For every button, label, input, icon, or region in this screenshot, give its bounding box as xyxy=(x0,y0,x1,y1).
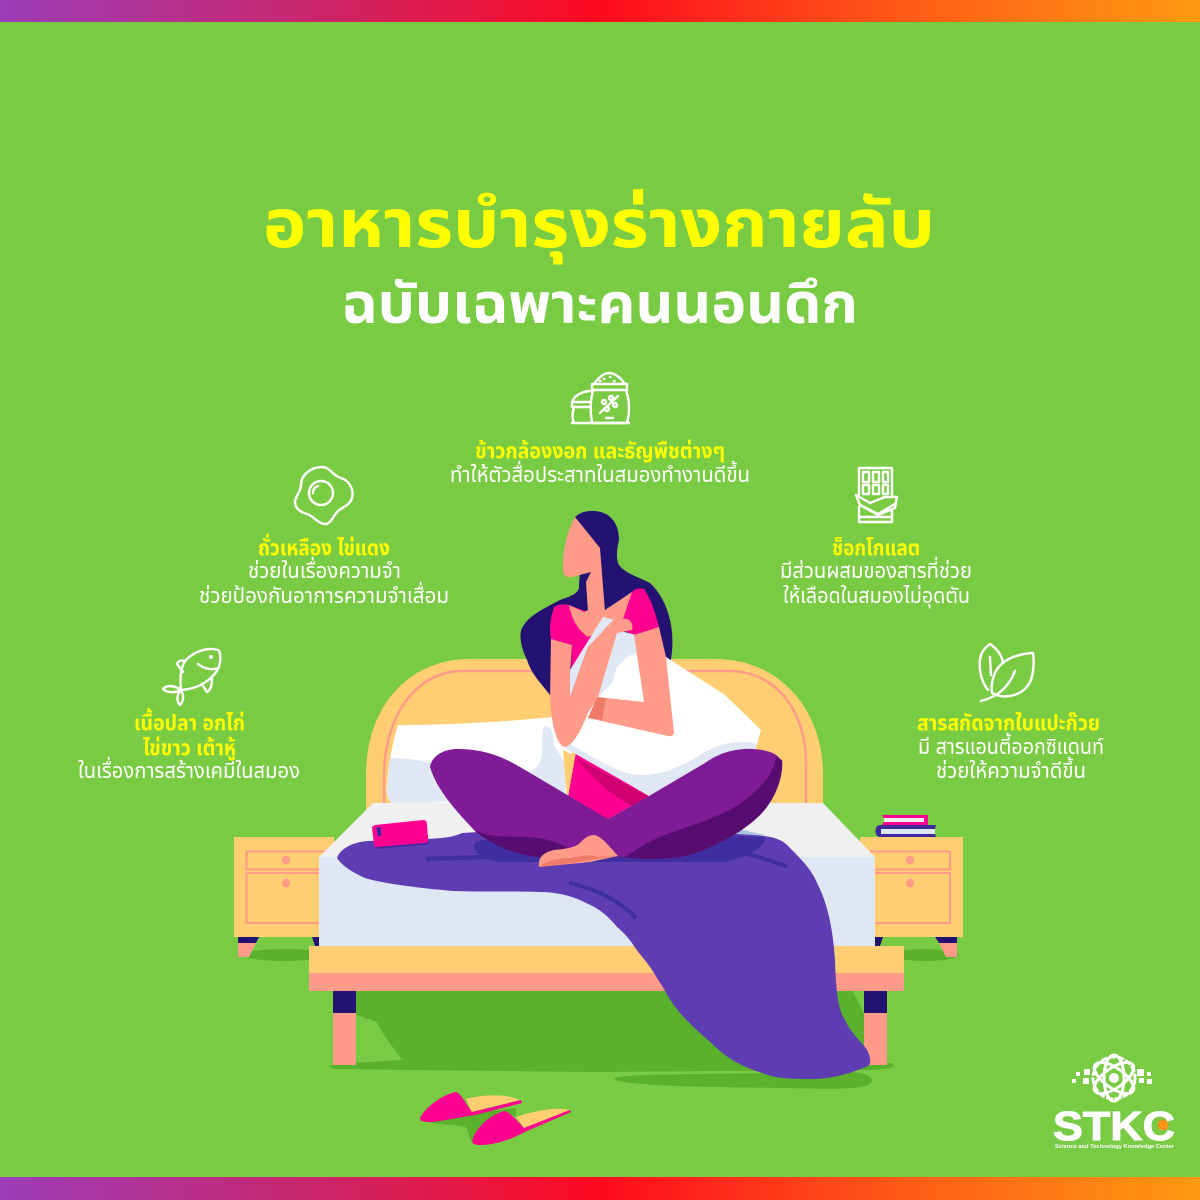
right nightstand xyxy=(860,837,963,957)
left slipper xyxy=(420,1092,522,1122)
headboard xyxy=(366,659,823,810)
slipper shadow xyxy=(425,1108,516,1143)
top gradient bar xyxy=(0,0,1200,22)
text: soybeans and egg yolk xyxy=(199,534,449,608)
text: ginkgo extract: สารสกัดจากใบแปะก๊วย xyxy=(917,712,1100,735)
right arm xyxy=(588,627,674,736)
blanket xyxy=(337,825,870,1079)
right slipper xyxy=(472,1109,571,1145)
hair xyxy=(520,511,672,700)
text: fish, chicken breast, egg white, tofu: ในเรื่องการสร้างเคมีในสมอง xyxy=(78,756,300,783)
text: brown rice and grains xyxy=(450,440,750,487)
text: chocolate xyxy=(780,537,972,609)
shadow on mattress behind legs xyxy=(705,825,765,845)
text: soybeans and egg yolk: ช่วยในเรื่องความจำ xyxy=(248,556,401,583)
left arm xyxy=(550,618,632,747)
text: ginkgo extract xyxy=(917,712,1104,783)
text: soybeans and egg yolk: ถั่วเหลือง ไข่แดง xyxy=(258,534,390,560)
icon: fish xyxy=(163,649,220,705)
hugged pillow xyxy=(560,617,761,800)
left nightstand xyxy=(234,837,336,957)
torso xyxy=(563,750,649,819)
text: chocolate: ช็อกโกแลต xyxy=(832,537,920,560)
icon: fried egg xyxy=(295,467,353,524)
back pillow xyxy=(387,717,575,805)
pajama shirt xyxy=(550,588,659,672)
title xyxy=(263,186,935,335)
text: brown rice and grains: ทำให้ตัวสื่อประสาทในสมองทำงานดีขึ้น xyxy=(450,460,750,487)
crossed legs xyxy=(430,749,782,859)
text: fish, chicken breast, egg white, tofu: ไข่ขาว เต้าหู้ xyxy=(143,737,236,761)
icon: ginkgo leaf xyxy=(980,644,1034,701)
text: fish, chicken breast, egg white, tofu xyxy=(78,708,300,783)
phone xyxy=(372,820,429,849)
text: brown rice and grains: ข้าวกล้องงอก และธัญพืชต่างๆ xyxy=(475,440,725,463)
logo wordmark: STKC xyxy=(1053,1103,1175,1149)
STKC logo xyxy=(1053,1055,1175,1150)
foot xyxy=(539,835,618,867)
mattress xyxy=(319,803,875,947)
icon: chocolate bar xyxy=(856,468,897,522)
icon: rice and grain sacks xyxy=(572,373,629,423)
bed frame xyxy=(309,946,904,1065)
title: ฉบับเฉพาะคนนอนดึก xyxy=(341,272,858,335)
text: soybeans and egg yolk: ช่วยป้องกันอาการความจำเสื่อม xyxy=(199,581,449,608)
woman xyxy=(430,511,782,867)
floor shadows under the bed xyxy=(243,949,959,1089)
text: chocolate: ให้เลือดในสมองไม่อุดตัน xyxy=(783,584,970,609)
stack of books xyxy=(876,815,936,837)
logo atom mark xyxy=(1072,1055,1152,1101)
title: อาหารบำรุงร่างกายลับ xyxy=(263,186,935,265)
chest xyxy=(569,592,632,637)
face and neck xyxy=(563,517,605,612)
STKC logo: Science and Technology Knowledge Center xyxy=(1055,1144,1175,1150)
text: fish, chicken breast, egg white, tofu: เนื้อปลา อกไก่ xyxy=(134,708,245,735)
text: ginkgo extract: มี สารแอนตี้ออกซิแดนท์ xyxy=(918,732,1104,759)
text: ginkgo extract: ช่วยให้ความจำดีขึ้น xyxy=(936,756,1086,783)
bottom gradient bar xyxy=(0,1177,1200,1200)
text: chocolate: มีส่วนผสมของสารที่ช่วย xyxy=(780,556,972,583)
